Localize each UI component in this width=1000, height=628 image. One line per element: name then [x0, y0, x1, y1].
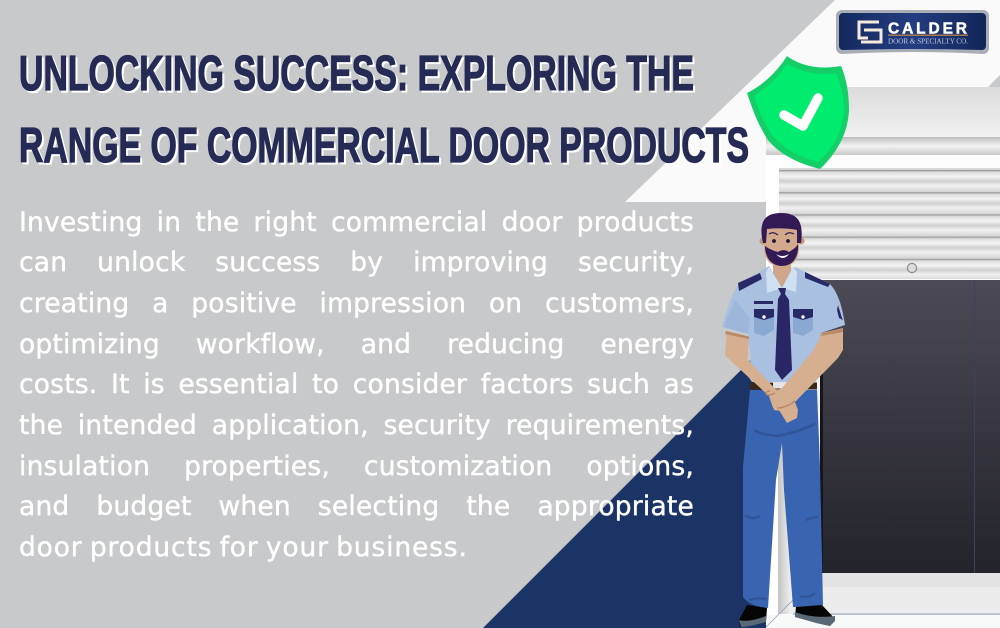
body paragraph: the intended application, security requirements, [19, 410, 694, 441]
body paragraph: optimizing workflow, and reducing energy [19, 329, 694, 360]
body paragraph: can unlock success by improving security, [19, 247, 694, 278]
guard: pockets [754, 301, 773, 304]
guard: necktie [775, 288, 792, 380]
background: navy diagonal panel [483, 345, 766, 628]
logo: Calder Door & Specialty Co.: CALDER [888, 20, 967, 38]
body paragraph: Investing in the right commercial door products [19, 206, 694, 238]
logo: Calder Door & Specialty Co.: DOOR & SPECIALTY CO. [888, 38, 968, 46]
body paragraph: costs. It is essential to consider factors such as [19, 369, 694, 400]
door jamb [778, 279, 820, 614]
body paragraph: and budget when selecting the appropriate [19, 491, 694, 522]
icon: green security shield [747, 56, 849, 169]
door threshold [820, 573, 1000, 587]
body paragraph: door products for your business. [19, 532, 468, 563]
door assembly [766, 75, 1000, 628]
door frame [766, 155, 1000, 168]
guard: neck [773, 255, 791, 292]
body paragraph: insulation properties, customization options, [19, 451, 694, 482]
dark door opening [820, 280, 1000, 573]
title: UNLOCKING SUCCESS: EXPLORING THE [19, 47, 694, 101]
guard: arms and hands [725, 331, 798, 423]
roller shutter [779, 168, 1000, 279]
title [19, 47, 749, 173]
guard: shirt [722, 266, 845, 382]
guard: pants [743, 390, 823, 608]
guard: collar [766, 267, 782, 293]
guard: shoulder epaulettes [738, 273, 762, 291]
guard: belt [750, 382, 817, 390]
door header [766, 87, 1000, 155]
body paragraph: creating a positive impression on customers, [19, 288, 694, 319]
security guard figure [722, 213, 845, 627]
body paragraph [19, 206, 694, 563]
guard: head [759, 237, 767, 245]
logo: Calder Door & Specialty Co. [836, 10, 989, 54]
guard: shoes [739, 605, 767, 627]
background: white diagonal panel [625, 0, 1000, 628]
